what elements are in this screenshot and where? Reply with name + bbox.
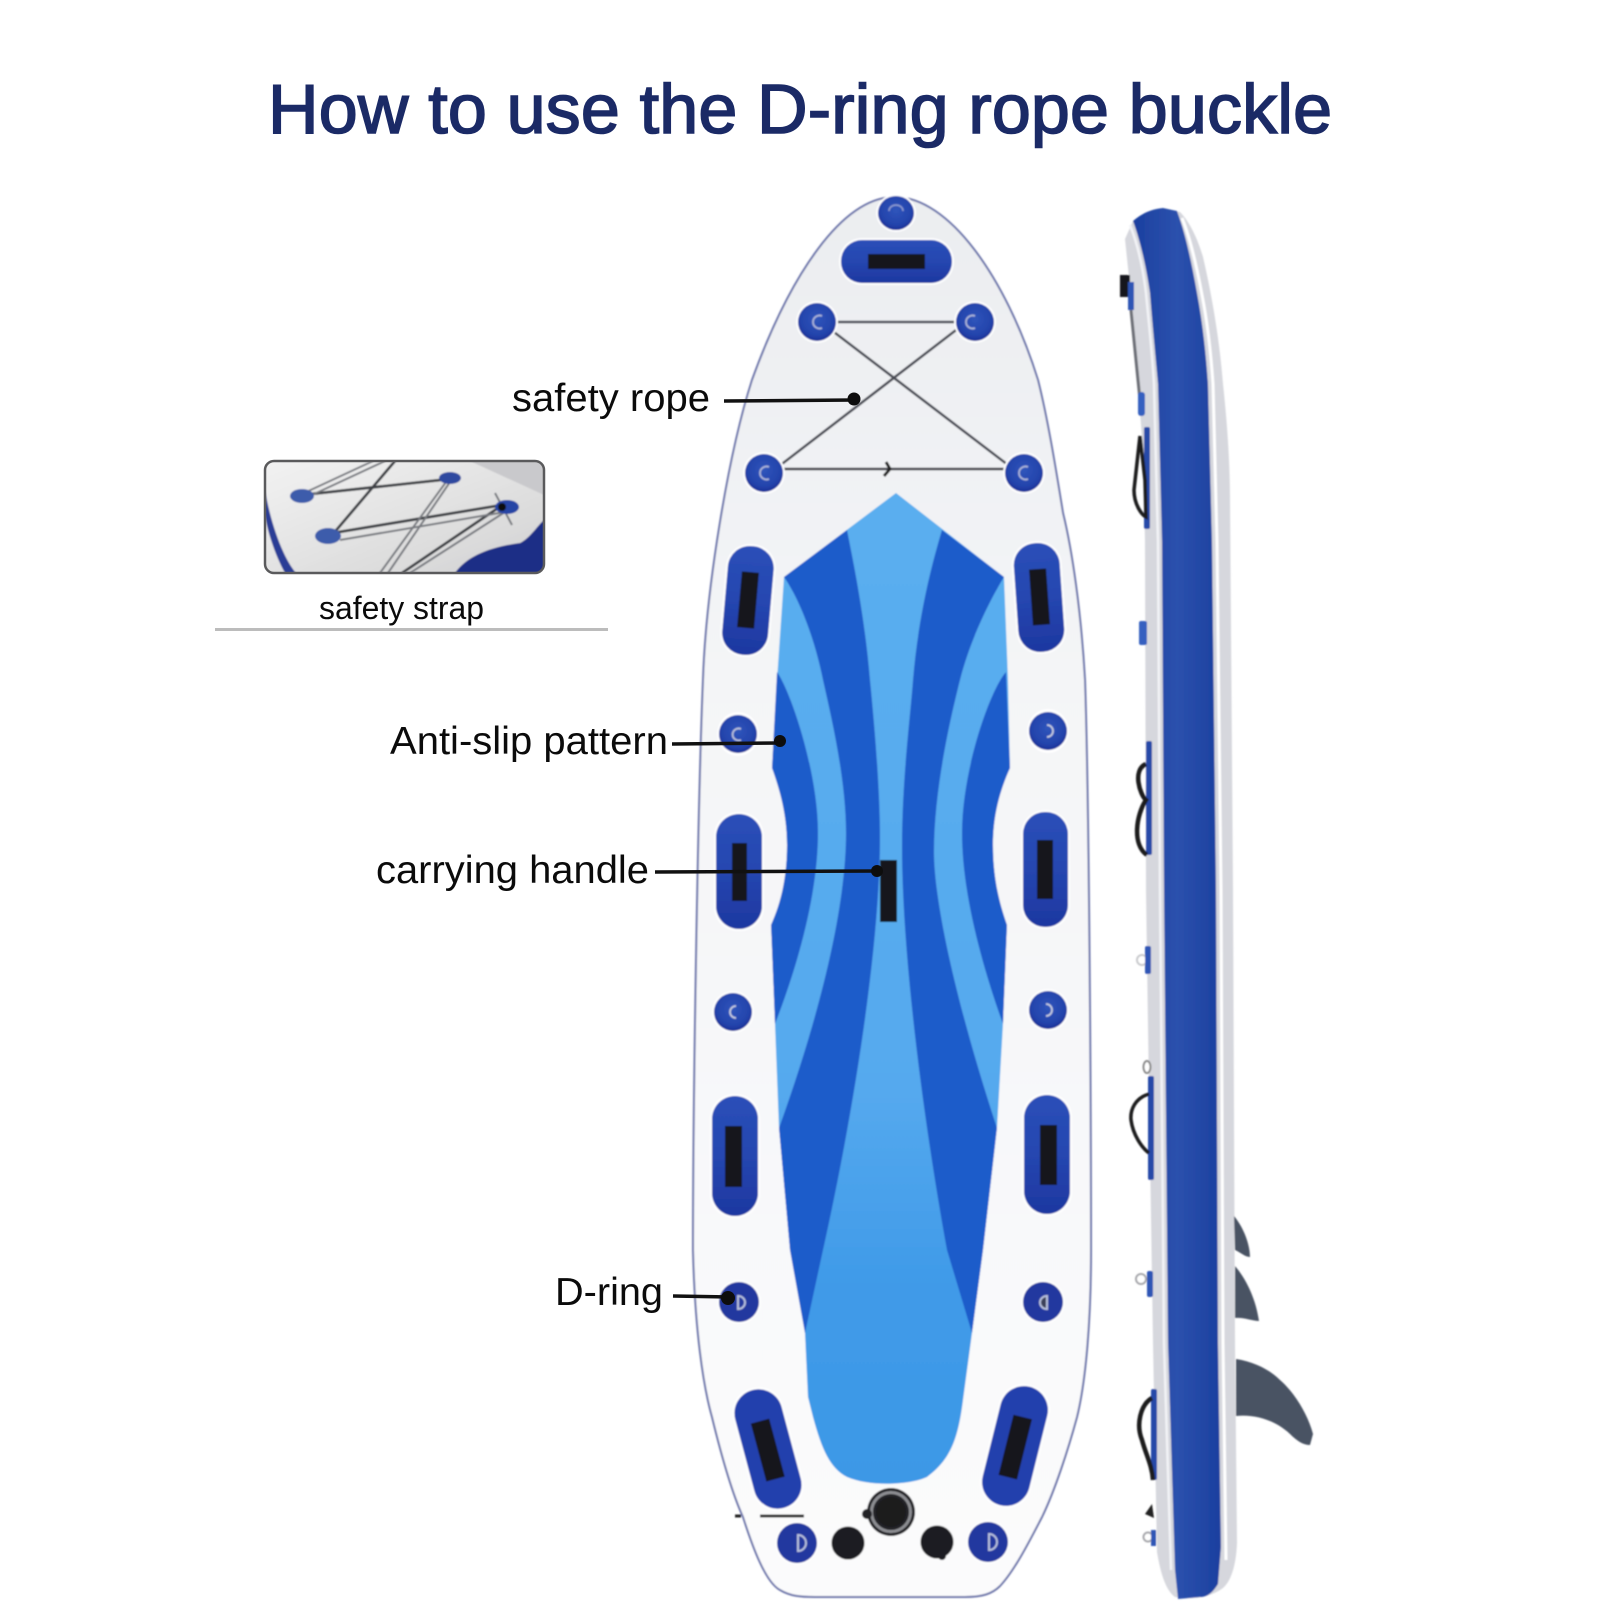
side blue stripe (1133, 208, 1221, 1599)
label: safety rope (512, 377, 860, 420)
pad outer left band (771, 672, 818, 1024)
valve (862, 1488, 915, 1536)
D-ring second left (743, 452, 785, 494)
side handle middle left (714, 812, 764, 931)
D-ring second right (1003, 452, 1045, 494)
pad outer right band (962, 672, 1010, 1024)
label: carrying handle (376, 849, 883, 892)
center carrying handle (880, 860, 897, 922)
side highlight left (1130, 225, 1171, 1570)
side handle middle right (1021, 810, 1070, 929)
D-ring tail right (1021, 1280, 1065, 1324)
side fittings (1120, 275, 1157, 1546)
label: anti-slip pattern: Anti-slip pattern (390, 720, 668, 763)
side handle lower right (1022, 1093, 1072, 1216)
pad inner right band (902, 530, 1004, 1333)
inset photo: safety strap (265, 461, 544, 573)
side handle upper left (718, 542, 778, 659)
side highlight right (1182, 218, 1226, 1560)
D-ring front right (954, 301, 996, 343)
rear handle left (727, 1381, 809, 1517)
small D-ring upper left (717, 712, 759, 756)
side handle upper right (1010, 539, 1068, 656)
small D-ring lower left (712, 991, 754, 1033)
title: How to use the D-ring rope buckle (268, 70, 1332, 148)
rear D-ring left (775, 1521, 819, 1565)
nose D-ring (876, 194, 916, 232)
small D-ring upper right (1027, 709, 1069, 753)
side body (1125, 208, 1237, 1598)
rear D-ring right (966, 1520, 1010, 1564)
small D-ring lower right (1027, 989, 1069, 1031)
anti-slip pad base (771, 493, 1010, 1484)
side fin small (1234, 1216, 1250, 1257)
side fin medium (1235, 1266, 1259, 1321)
D-ring front left (796, 301, 838, 343)
board outline (693, 197, 1091, 1597)
D-ring tail left (717, 1280, 761, 1324)
label: D-ring: D-ring (555, 1271, 663, 1314)
rear handle right (975, 1379, 1055, 1513)
stray marks (735, 1514, 804, 1518)
label: carrying handle: carrying handle (376, 849, 649, 892)
pad inner left band (779, 530, 880, 1333)
nose carrying handle (839, 238, 954, 285)
label: D-ring (555, 1271, 735, 1314)
caption: safety strap: safety strap (319, 590, 484, 626)
side handle lower left (710, 1094, 760, 1218)
paddle board top view (693, 194, 1091, 1597)
label: anti-slip pattern (390, 720, 786, 763)
paddle board side view (1120, 208, 1313, 1599)
black plug right (920, 1526, 954, 1560)
side fin large (1236, 1359, 1313, 1445)
label: safety rope: safety rope (512, 377, 710, 420)
black plug left (832, 1526, 864, 1560)
safety rope (770, 322, 1018, 476)
